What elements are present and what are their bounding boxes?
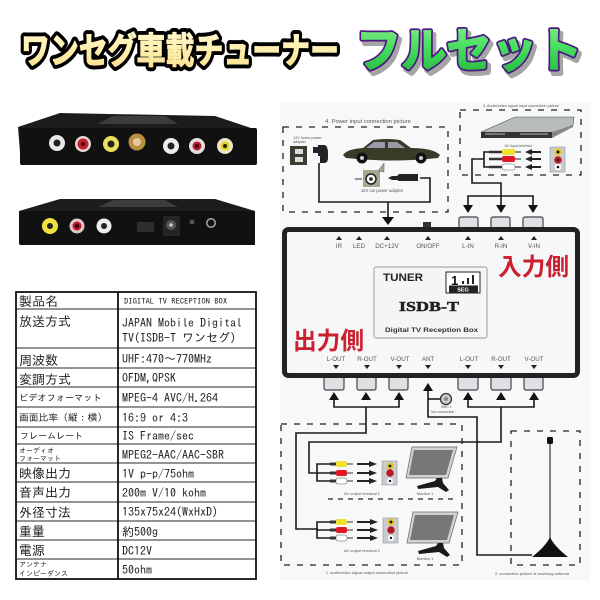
- table values: DC12V: [122, 545, 152, 557]
- table values: 16:9 or 4:3: [122, 412, 188, 424]
- output port labels: L-OUT: [460, 356, 479, 363]
- table values: [122, 297, 242, 576]
- icon: monitor 1: Monitor 1: [417, 491, 434, 496]
- icon: input terminal: [550, 147, 565, 172]
- output port labels: R-OUT: [491, 356, 511, 363]
- table labels: アンテナ: [19, 561, 47, 568]
- table labels: 変調方式: [19, 373, 71, 386]
- terminal group 1: [317, 461, 397, 496]
- panel: tuner box: [284, 230, 578, 376]
- table values: 200m V/10 kohm: [122, 486, 206, 499]
- panel: audio video output connection: [281, 424, 462, 575]
- panel: receiving antenna connection: 2. connection picture of receiving antenna: [495, 571, 570, 576]
- panel: audio video input connection: AV input terminal: [504, 144, 532, 148]
- icon: SMC nut connector: [431, 394, 454, 414]
- panel: power input connection: 12V home power: [293, 136, 322, 140]
- title: full set: フルセット: [359, 16, 585, 85]
- on/off switch: [423, 222, 431, 229]
- icon: 1 seg logo: 1: [451, 273, 458, 288]
- panel: power input connection: 4. Power input connection picture: [325, 119, 411, 125]
- icon: 1 seg logo: [446, 272, 480, 294]
- table labels: オーディオ: [19, 447, 54, 454]
- output sockets: [324, 376, 543, 390]
- table values: IS Frame/sec: [122, 429, 194, 442]
- icon: input RCA plugs: [489, 149, 521, 170]
- table values: 1V p-p/75ohm: [122, 467, 194, 480]
- table labels: フォーマット: [19, 455, 61, 462]
- table labels: フレームレート: [20, 432, 83, 441]
- tuner label plate: TUNER: [383, 272, 423, 284]
- table labels: 電源: [19, 544, 45, 557]
- title: product name: ワンセグ車載チューナー: [21, 22, 339, 74]
- icon: car: [343, 139, 440, 164]
- table labels: 周波数: [19, 354, 58, 367]
- output port labels: V-OUT: [525, 356, 544, 363]
- specification table: [16, 292, 256, 579]
- table values: JAPAN Mobile Digital: [122, 317, 242, 329]
- arrows: into input plugs: [525, 149, 541, 170]
- icon: wall socket: [290, 146, 307, 165]
- panel: power input connection: 12V car power adapter: [361, 188, 404, 193]
- output port labels: [327, 356, 544, 369]
- output port labels: L-OUT: [327, 356, 346, 363]
- output port labels: R-OUT: [357, 356, 377, 363]
- table labels: 製品名: [19, 295, 58, 308]
- input port labels: L-IN: [462, 243, 474, 250]
- table values: MPEG-4 AVC/H.264: [122, 391, 218, 404]
- table labels: ビデオフォーマット: [19, 393, 102, 403]
- input port labels: LED: [353, 243, 366, 250]
- table labels: 音声出力: [19, 486, 71, 499]
- table labels: 画面比率（縦：横）: [19, 412, 107, 423]
- table values: DIGITAL TV RECEPTION BOX: [124, 297, 227, 306]
- panel: connection diagram background: [280, 102, 590, 580]
- icon: 1 seg logo: SEG: [457, 288, 469, 294]
- tuner label plate: [374, 267, 487, 338]
- output port labels: ANT: [422, 356, 434, 363]
- label: output side: 出力側: [293, 321, 364, 356]
- panel: audio video output connection: 1. audio/video signal output connection picture: [326, 570, 409, 575]
- table values: TV(ISDB-T ワンセグ): [122, 331, 236, 344]
- table values: MPEG2-AAC/AAC-SBR: [122, 448, 224, 461]
- icon: home power adapter: [313, 145, 328, 163]
- icon: SMC nut connector: Nut connection: [431, 410, 454, 414]
- table labels: 映像出力: [19, 467, 71, 480]
- table values: 135x75x24(WxHxD): [122, 505, 218, 518]
- tuner label plate: ISDB-T: [399, 300, 460, 315]
- panel: audio video input connection: [460, 104, 581, 213]
- panel: power input connection: adapter: [293, 140, 307, 144]
- table labels: [19, 295, 107, 577]
- photo: tuner rear panel: [19, 199, 255, 245]
- icon: monitor 2: Monitor 1: [417, 556, 434, 561]
- title: full set: フルセット: [356, 12, 582, 81]
- input sockets: [459, 217, 543, 231]
- input port labels: DC+12V: [375, 243, 400, 250]
- table labels: 放送方式: [19, 315, 71, 328]
- table values: 50ohm: [122, 564, 152, 576]
- terminal group 1: AV output terminal 1: [344, 491, 381, 496]
- table values: 約500g: [122, 526, 158, 538]
- table labels: 重量: [19, 525, 45, 538]
- table labels: インピーダンス: [19, 570, 68, 577]
- icon: car power plug: [388, 174, 418, 181]
- icon: SMC nut connector: SMC 1: [441, 405, 452, 409]
- label: input side: 入力側: [498, 247, 569, 282]
- tuner label plate: Digital TV Reception Box: [385, 327, 478, 334]
- title: product name: ワンセグ車載チューナー: [21, 22, 339, 74]
- panel: power input connection: [283, 119, 448, 225]
- input port labels: [336, 236, 540, 250]
- arrows: to input sockets: [463, 152, 538, 213]
- input port labels: R-IN: [495, 243, 507, 250]
- icon: car socket: [355, 163, 384, 187]
- icon: monitor 2: [407, 512, 458, 561]
- input port labels: ON/OFF: [416, 243, 440, 250]
- input port labels: IR: [336, 243, 343, 250]
- panel: audio video input connection: 3. Audio/video signal input connection picture: [483, 104, 559, 108]
- output port labels: V-OUT: [391, 356, 410, 363]
- table values: UHF:470～770MHz: [122, 353, 212, 365]
- terminal group 2: [317, 518, 398, 553]
- arrow: power to DC input: [319, 163, 430, 225]
- icon: DVD player: [481, 117, 574, 138]
- arrows: output sockets and antenna wiring: [296, 383, 539, 555]
- photo: tuner front panel: [18, 113, 257, 165]
- icon: antenna: [532, 437, 568, 557]
- terminal group 2: AV output terminal 2: [344, 548, 381, 553]
- panel: receiving antenna connection: [495, 431, 580, 576]
- table values: OFDM,QPSK: [122, 372, 176, 384]
- input port labels: V-IN: [528, 243, 540, 250]
- table labels: 外径寸法: [19, 506, 71, 519]
- icon: monitor 1: [406, 447, 457, 496]
- title: full set: フルセット: [356, 12, 582, 81]
